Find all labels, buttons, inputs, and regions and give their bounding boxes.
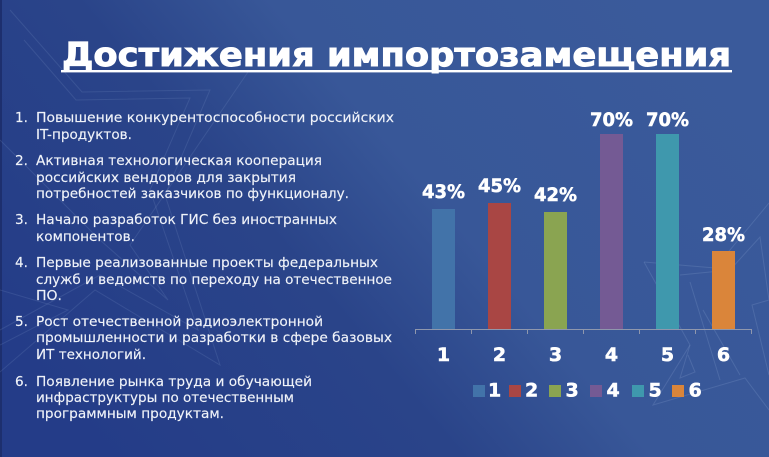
item 2: российских вендоров для закрытия: [36, 170, 296, 186]
item 5: 5.: [15, 314, 28, 330]
legend: 3: [566, 380, 579, 402]
item 5: ИТ технологий.: [36, 347, 146, 363]
axis line: [416, 330, 752, 334]
item 5: Рост отечественной радиоэлектронной: [36, 314, 323, 330]
item 1: 1.: [15, 110, 28, 126]
item 2: [15, 153, 349, 202]
category labels: 5: [661, 344, 674, 366]
bars: [432, 134, 735, 329]
value labels: 28%: [702, 224, 745, 246]
item 6: программным продуктам.: [36, 406, 224, 422]
item 2: Активная технологическая кооперация: [36, 153, 322, 169]
legend: 2: [525, 380, 538, 402]
legend: 4: [606, 380, 620, 402]
item 6: инфраструктуры по отечественным: [36, 390, 294, 406]
category labels: 4: [605, 344, 618, 366]
item 5: [15, 314, 392, 363]
decorative star left: [0, 10, 248, 372]
value labels: 70%: [646, 109, 689, 131]
decorative star right: [644, 203, 769, 410]
item 1: Повышение конкурентоспособности российских: [36, 110, 394, 126]
category labels: 3: [549, 344, 562, 366]
legend: 5: [648, 380, 662, 402]
item 1: [15, 110, 394, 143]
category labels: 1: [437, 344, 450, 366]
item 3: 3.: [15, 212, 28, 228]
item 3: [15, 212, 337, 245]
legend: 1: [488, 380, 501, 402]
item 4: 4.: [15, 255, 28, 271]
item 2: 2.: [15, 153, 28, 169]
value labels: 70%: [590, 109, 633, 131]
value labels: 42%: [534, 184, 577, 206]
legend: [473, 380, 702, 402]
value labels: 45%: [478, 175, 521, 197]
item 3: компонентов.: [36, 229, 135, 245]
value labels: 43%: [422, 181, 465, 203]
value labels: [422, 109, 745, 246]
item 4: Первые реализованные проекты федеральных: [36, 255, 378, 271]
item 6: [15, 374, 312, 422]
category labels: 2: [493, 344, 506, 366]
item 4: ПО.: [36, 288, 62, 304]
item 6: Появление рынка труда и обучающей: [36, 374, 312, 390]
item 3: Начало разработок ГИС без иностранных: [36, 212, 337, 228]
item 4: служб и ведомств по переходу на отечественное: [36, 272, 392, 288]
bar chart: [416, 109, 752, 402]
legend: 6: [688, 380, 702, 402]
item 2: потребностей заказчиков по функционалу.: [36, 186, 349, 202]
item 4: [15, 255, 392, 304]
category labels: [437, 344, 730, 366]
achievements list: [15, 110, 394, 422]
title: Достижения импортозамещения: [62, 35, 731, 74]
item 1: IT-продуктов.: [36, 127, 132, 143]
item 5: промышленности и разработки в сфере базовых: [36, 330, 392, 346]
category labels: 6: [717, 344, 730, 366]
item 6: 6.: [15, 374, 28, 390]
